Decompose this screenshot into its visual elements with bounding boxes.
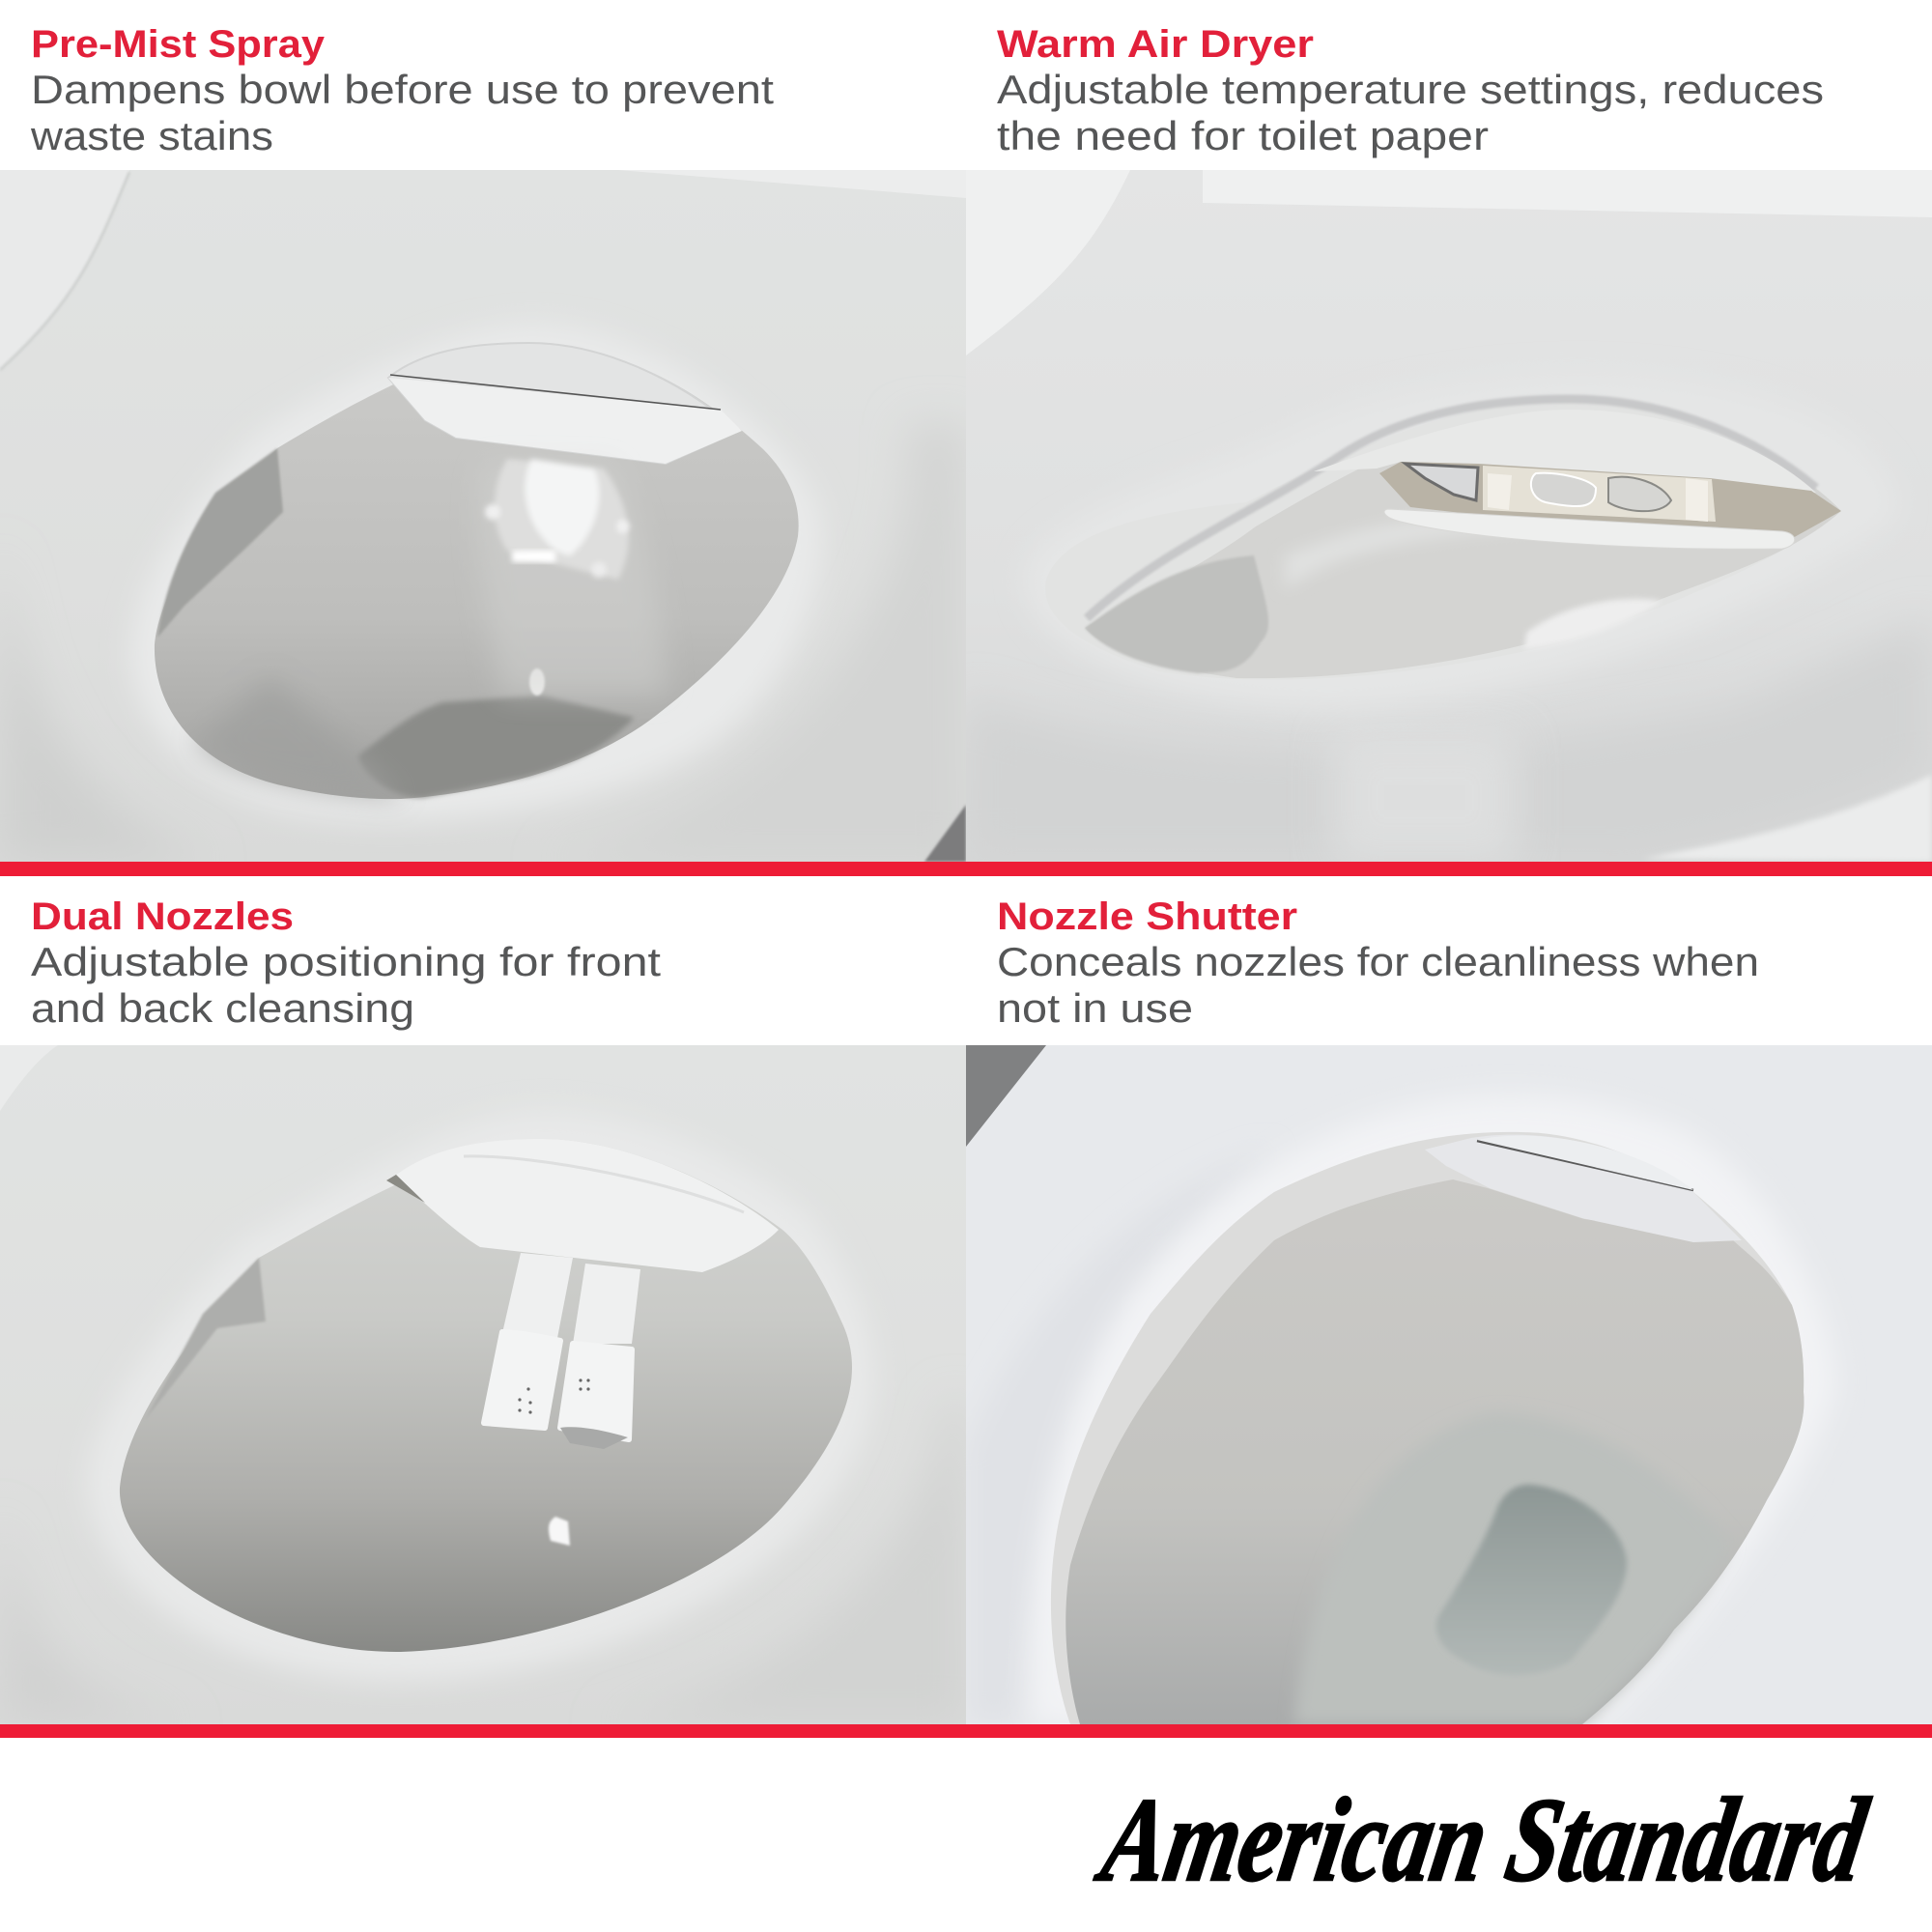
mist spray [479,459,667,696]
caption: dual nozzles: and back cleansing [31,985,414,1031]
bowl opening [1051,1132,1804,1724]
caption: pre-mist spray [30,23,774,158]
caption: warm air dryer: Adjustable temperature settings, reduces [997,67,1824,112]
caption: pre-mist spray: waste stains [30,113,273,158]
dome and shutter [394,1139,779,1272]
caption: dual nozzles: Adjustable positioning for front [31,939,661,984]
dome and shutter [388,343,739,464]
photo: pre-mist spray [0,170,966,862]
divider bars [0,862,1932,1738]
caption: warm air dryer: Warm Air Dryer [997,23,1314,66]
dryer shutter [1384,509,1795,549]
caption: dual nozzles: Dual Nozzles [31,895,294,938]
caption: warm air dryer [997,23,1824,158]
drain [1436,1485,1627,1675]
caption: warm air dryer: the need for toilet paper [997,113,1489,158]
inner bowl wall [1065,1179,1804,1724]
dryer opening [1045,399,1841,680]
caption: dual nozzles [31,895,661,1031]
caption: pre-mist spray: Dampens bowl before use to prevent [31,67,774,112]
caption: nozzle shutter [997,895,1759,1031]
caption: nozzle shutter: Conceals nozzles for cleanliness when [997,939,1759,984]
bowl opening [155,343,799,799]
inner bowl [1294,1413,1730,1724]
caption: nozzle shutter: Nozzle Shutter [997,895,1297,938]
shutter panel [1425,1135,1742,1242]
seat shadow arc [1087,399,1816,618]
photo: warm air dryer [966,170,1932,862]
photo: dual nozzles [0,1045,966,1724]
bowl opening [120,1139,852,1652]
dryer mechanism [1379,462,1841,537]
right nozzle [560,1264,640,1449]
left nozzle [484,1253,573,1428]
caption: nozzle shutter: not in use [997,985,1193,1031]
photo: nozzle shutter [966,1045,1932,1724]
caption: pre-mist spray: Pre-Mist Spray [31,23,326,66]
